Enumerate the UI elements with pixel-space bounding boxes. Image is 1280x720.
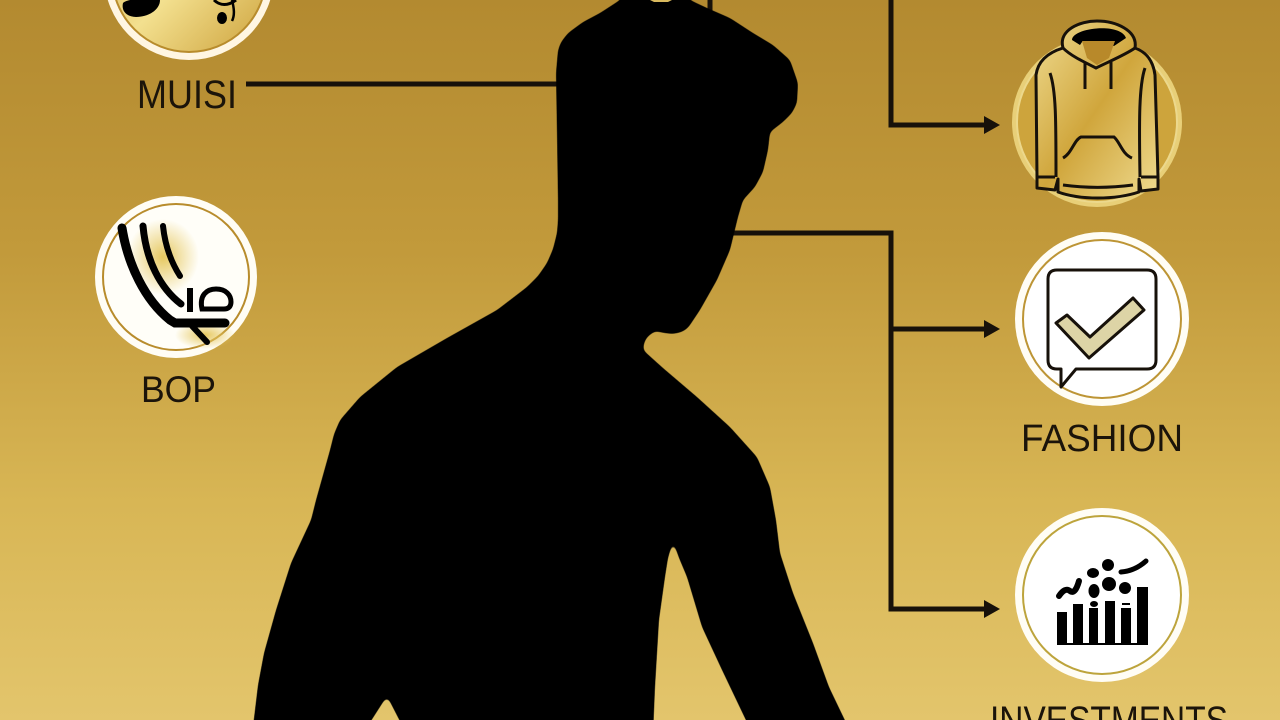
icon: hoodie: [1012, 21, 1182, 207]
label: music: MUISI: [137, 73, 237, 117]
connector lines: [246, 0, 985, 609]
icon: fashion: [1015, 232, 1189, 406]
label: fashion: FASHION: [1021, 418, 1183, 460]
icon: bop: [95, 196, 257, 358]
icon: investments: [1015, 508, 1189, 682]
arrowheads: [984, 116, 1000, 618]
icon: music: [104, 0, 274, 60]
label: bop: BOP: [141, 369, 216, 410]
head highlight gap: [650, 0, 672, 2]
person silhouette: [252, 0, 852, 720]
